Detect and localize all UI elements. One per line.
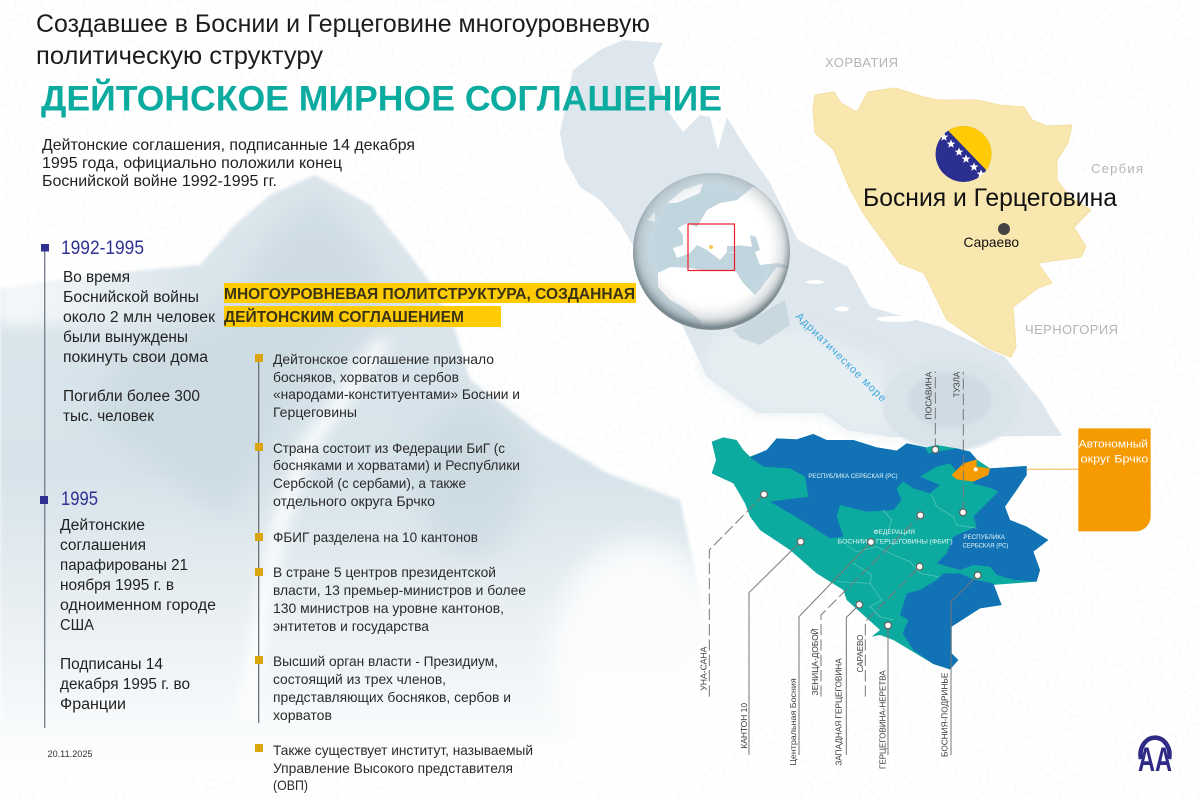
- bullet 6: [255, 742, 533, 793]
- bullet 2: Страна состоит из Федерации БиГ (с: [273, 440, 505, 456]
- entity labels: БОСНИИ И ГЕРЦЕГОВИНЫ (ФБИГ): [838, 538, 953, 545]
- bullet 6: Также существует институт, называемый: [273, 742, 533, 758]
- red locator box: [688, 224, 734, 270]
- entity labels: РЕСПУБЛИКА: [963, 534, 1006, 541]
- Eurasia land: [673, 187, 795, 267]
- intro text: [42, 137, 415, 190]
- neighbouring country labels: Сербия: [1091, 161, 1143, 176]
- timeline entry 1992-1995: 1992-1995: [61, 238, 144, 259]
- bullet 4: В стране 5 центров президентской: [273, 564, 496, 580]
- globe: [633, 173, 795, 335]
- capital marker: Сараево: [964, 234, 1019, 250]
- Greenland land: [667, 183, 703, 203]
- locator map of Bosnia and Herzegovina: [813, 88, 1117, 357]
- region labels: ЗАПАДНАЯ ГЕРЦЕГОВИНА: [833, 658, 843, 766]
- administrative map of entities and cantons: [698, 371, 1151, 769]
- bullet 2: босняками и хорватами) и Республики: [273, 457, 520, 473]
- bullet 2: Сербской (с сербами), а также: [273, 475, 466, 491]
- timeline entry 1995: одноименном городе: [60, 597, 216, 614]
- title: ДЕЙТОНСКОЕ МИРНОЕ СОГЛАШЕНИЕ: [41, 78, 722, 118]
- leader lines: [709, 372, 978, 755]
- timeline entry 1992-1995: [41, 238, 215, 425]
- neighbouring country labels: [825, 55, 1143, 337]
- region labels: ПОСАВИНА: [924, 371, 934, 419]
- icon: Bosnia locator: [709, 245, 713, 249]
- region labels: БОСНИЯ-ПОДРИНЬЕ: [940, 672, 950, 757]
- bullet 1: Герцеговины: [273, 404, 357, 420]
- entity labels: [808, 473, 1008, 550]
- bullet list: [255, 351, 533, 793]
- Caspian and Black seas: [750, 235, 760, 253]
- bullet 3: ФБИГ разделена на 10 кантонов: [273, 529, 478, 545]
- date: 20.11.2025: [48, 749, 92, 760]
- bullet 5: хорватов: [273, 707, 332, 723]
- subtitle: [36, 10, 650, 70]
- logo: Anadolu Agency: [1138, 738, 1172, 779]
- region markers: [761, 446, 981, 629]
- timeline entry 1995: Дейтонские: [60, 517, 145, 534]
- section heading: ДЕЙТОНСКИМ СОГЛАШЕНИЕМ: [224, 308, 464, 326]
- subtitle: Создавшее в Боснии и Герцеговине многоуровневую: [36, 10, 650, 38]
- bullet 2: отдельного округа Брчко: [273, 493, 435, 509]
- bullet 1: Дейтонское соглашение признало: [273, 351, 494, 367]
- bullet 5: Высший орган власти - Президиум,: [273, 653, 498, 669]
- bullet 4: энтитетов и государства: [273, 618, 429, 634]
- bullet 4: власти, 13 премьер-министров и более: [273, 582, 526, 598]
- timeline entry 1992-1995: тыс. человек: [63, 408, 154, 425]
- Brcko district: [952, 459, 990, 482]
- bullet 1: [255, 351, 520, 420]
- region labels: КАНТОН 10: [739, 703, 749, 749]
- timeline: [40, 238, 216, 728]
- Brcko callout: Автономный: [1079, 439, 1148, 451]
- entity labels: РЕСПУБЛИКА СЕРБСКАЯ (РС): [808, 473, 898, 480]
- timeline entry 1992-1995: Боснийской войны: [63, 289, 199, 306]
- neighbouring country labels: ХОРВАТИЯ: [825, 55, 898, 70]
- sea label: Адриатическое море: [793, 311, 888, 405]
- timeline entry 1995: Франции: [60, 696, 126, 713]
- timeline entry 1995: парафированы 21: [60, 557, 188, 574]
- logo: Anadolu Agency: AA: [1138, 741, 1172, 779]
- bullet 5: представляющих босняков, сербов и: [273, 689, 511, 705]
- Africa and Arabia land: [658, 267, 788, 330]
- bullet 5: [255, 653, 511, 723]
- bullet 6: (ОВП): [273, 777, 308, 793]
- bullet 1: «народами-конституентами» Боснии и: [273, 386, 520, 402]
- bullet 6: Управление Высокого представителя: [273, 760, 513, 776]
- entity labels: СЕРБСКАЯ (РС): [963, 543, 1008, 550]
- region labels: ТУЗЛА: [951, 371, 961, 397]
- capital marker: [964, 223, 1019, 250]
- region labels: [698, 371, 961, 769]
- timeline entry 1995: ноября 1995 г. в: [60, 577, 174, 594]
- timeline entry 1995: [40, 489, 216, 713]
- Brcko callout: округ Брчко: [1081, 454, 1148, 466]
- section heading: МНОГОУРОВНЕВАЯ ПОЛИТСТРУКТУРА, СОЗДАННАЯ: [224, 286, 635, 303]
- region labels: ГЕРЦЕГОВИНА-НЕРЕТВА: [878, 670, 888, 769]
- intro text: Боснийской войне 1992-1995 гг.: [42, 173, 277, 190]
- bullet 1: босняков, хорватов и сербов: [273, 369, 459, 385]
- intro text: 1995 года, официально положили конец: [42, 155, 342, 172]
- timeline entry 1995: декабря 1995 г. во: [60, 676, 190, 693]
- bullet 2: [255, 440, 520, 509]
- timeline entry 1995: соглашения: [60, 537, 146, 554]
- country name: Босния и Герцеговина: [863, 184, 1117, 212]
- region labels: ЗЕНИЦА-ДОБОЙ: [809, 628, 820, 695]
- timeline entry 1995: США: [60, 617, 95, 634]
- intro text: Дейтонские соглашения, подписанные 14 декабря: [42, 137, 415, 154]
- timeline entry 1995: 1995: [61, 489, 98, 510]
- region labels: УНА-САНА: [698, 646, 708, 691]
- section heading: [224, 283, 636, 327]
- Brcko callout: [1027, 428, 1151, 531]
- bullet 4: 130 министров на уровне кантонов,: [273, 600, 504, 616]
- timeline entry 1992-1995: Во время: [63, 269, 130, 286]
- region labels: Центральная Босния: [788, 678, 798, 766]
- region labels: САРАЕВО: [855, 634, 865, 672]
- timeline entry 1992-1995: около 2 млн человек: [63, 309, 215, 326]
- timeline entry 1992-1995: Погибли более 300: [63, 388, 200, 405]
- bullet 5: состоящий из трех членов,: [273, 671, 446, 687]
- timeline entry 1992-1995: покинуть свои дома: [63, 349, 208, 366]
- neighbouring country labels: ЧЕРНОГОРИЯ: [1025, 322, 1118, 337]
- timeline entry 1995: Подписаны 14: [60, 656, 163, 673]
- subtitle: политическую структуру: [36, 42, 323, 70]
- icon: flag of Bosnia and Herzegovina: [936, 126, 992, 182]
- entity labels: ФЕДЕРАЦИЯ: [873, 529, 915, 536]
- bullet 4: [255, 564, 526, 634]
- timeline entry 1992-1995: были вынуждены: [63, 329, 188, 346]
